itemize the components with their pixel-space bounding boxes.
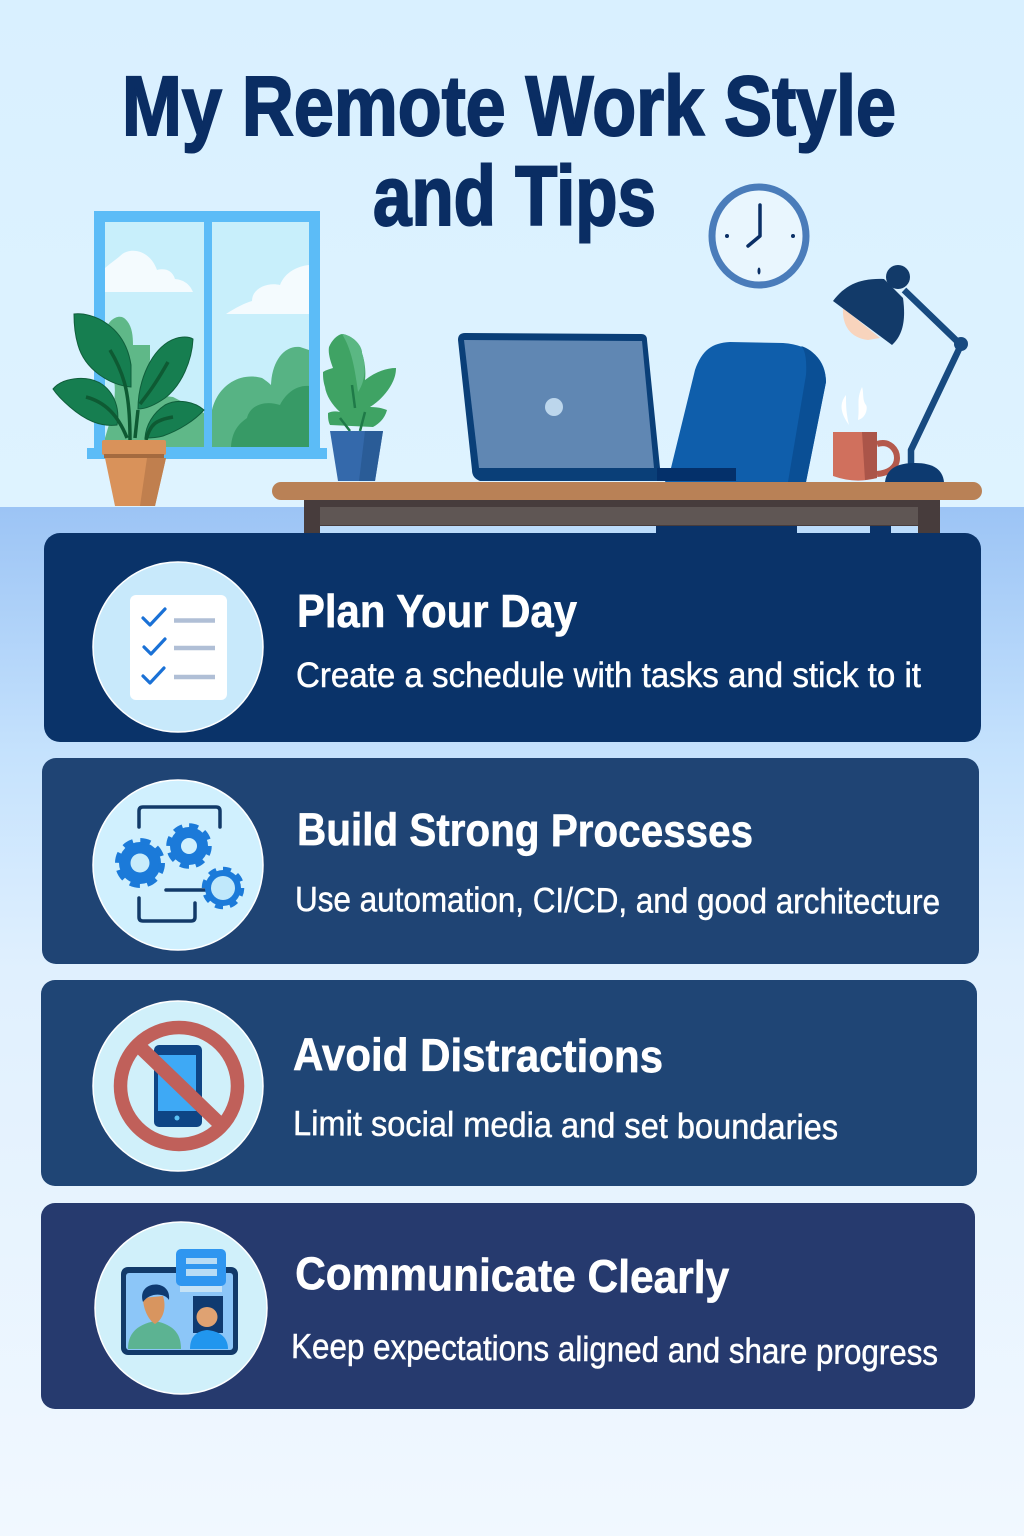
coffee mug with steam <box>833 387 897 481</box>
description: plan your day: Create a schedule with tasks and stick to it <box>296 656 921 695</box>
icon: video call <box>95 1222 267 1394</box>
wall clock <box>712 187 806 285</box>
background floor <box>0 507 1024 1536</box>
window with outdoor view <box>87 211 327 459</box>
icon: no phone <box>93 1001 263 1171</box>
icon: gears <box>93 780 263 950</box>
office chair <box>665 342 826 482</box>
desk <box>272 482 982 533</box>
desk lamp <box>833 265 968 482</box>
background wall <box>0 0 1024 507</box>
panel: avoid distractions <box>41 980 977 1186</box>
title: and Tips <box>373 149 656 243</box>
heading: avoid distractions: Avoid Distractions <box>293 1028 663 1082</box>
icon: checklist <box>93 562 263 732</box>
panel: plan your day <box>44 533 981 742</box>
description: communicate clearly: Keep expectations aligned and share progress <box>291 1327 938 1373</box>
large potted plant <box>53 314 204 506</box>
heading: build strong processes: Build Strong Processes <box>297 803 753 857</box>
panel: communicate clearly <box>41 1203 975 1409</box>
panel: build strong processes <box>42 758 979 964</box>
heading: communicate clearly: Communicate Clearly <box>295 1247 730 1303</box>
laptop <box>458 333 736 481</box>
heading: plan your day: Plan Your Day <box>297 585 577 637</box>
title <box>122 59 896 243</box>
description: build strong processes: Use automation, CI/CD, and good architecture <box>295 880 940 922</box>
title: My Remote Work Style <box>122 59 896 153</box>
description: avoid distractions: Limit social media and set boundaries <box>293 1104 838 1147</box>
small potted plant <box>323 334 396 481</box>
